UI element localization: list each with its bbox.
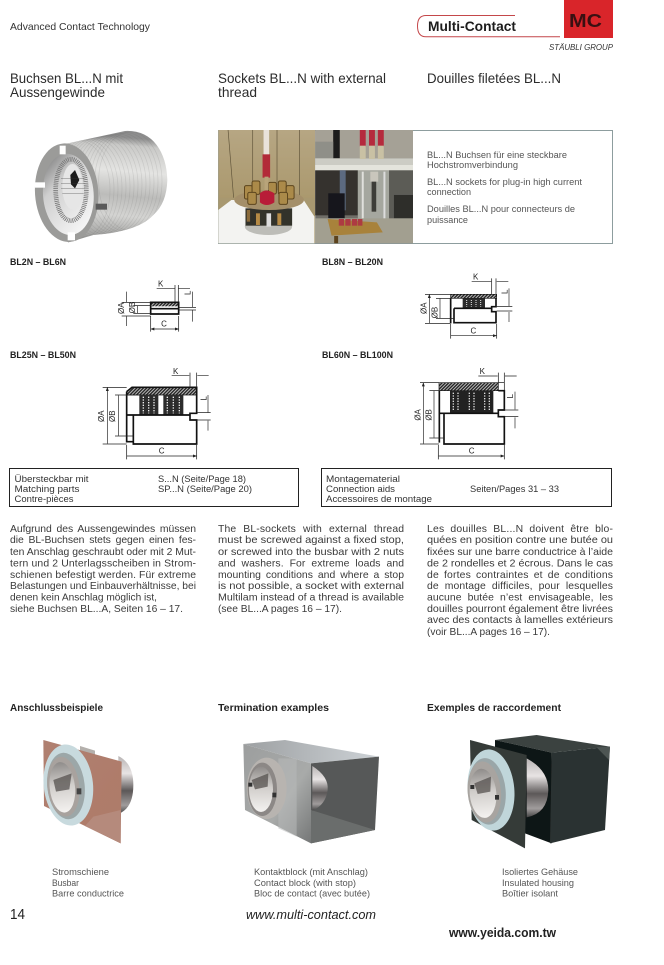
text block: French description: avec des contacts à lamelles extérieurs	[427, 615, 613, 626]
panel caption: plug-in high current connection: puissance	[427, 215, 468, 226]
box: connection aids: Accessoires de montage	[326, 494, 432, 505]
label: BL8N – BL20N: BL8N – BL20N	[322, 256, 383, 267]
caption: insulated housing	[502, 867, 578, 900]
drawing: BL60N–BL100N dimensions: ØA	[413, 408, 422, 421]
heading: German: Buchsen BL...N mit	[10, 70, 123, 86]
caption: contact block: Bloc de contact (avec butée)	[254, 888, 370, 900]
heading: English: thread	[218, 84, 257, 100]
caption: busbar: Barre conductrice	[52, 888, 124, 900]
text block: English description: is not possible, a socket with external	[218, 581, 404, 592]
text block: German description: Belastungen und Einbauverhältnisse, bei	[10, 581, 196, 592]
text block: French description: aucune butée n’est envisageable, les	[427, 592, 613, 604]
drawing: BL8N–BL20N dimensions	[420, 272, 512, 339]
text block: French description: (voir BL...A pages 16 – 17).	[427, 627, 550, 638]
label: BL2N – BL6N: BL2N – BL6N	[10, 256, 66, 267]
label: BL60N – BL100N: BL60N – BL100N	[322, 349, 393, 360]
text block: English description	[218, 524, 404, 615]
label: BL25N – BL50N: BL25N – BL50N	[10, 349, 76, 360]
text block: English description: The BL-sockets with external thread	[218, 524, 404, 535]
drawing: BL25N–BL50N dimensions: K	[173, 367, 179, 376]
box: matching parts	[10, 468, 298, 506]
website: yeida: www.yeida.com.tw	[448, 926, 556, 940]
text block: English description: mounting conditions and where a stop	[218, 570, 404, 581]
box: matching parts: S...N (Seite/Page 18)	[158, 474, 246, 485]
drawing: BL25N–BL50N dimensions: ØB	[108, 410, 117, 422]
text block: French description: de fortes contraintes et de conditions	[427, 570, 613, 581]
drawing: BL25N–BL50N dimensions	[97, 367, 211, 459]
page number: 14	[10, 907, 25, 923]
text block: French description	[427, 524, 613, 638]
header: running title: Advanced Contact Technology	[10, 22, 151, 33]
caption: busbar: Stromschiene	[52, 867, 109, 878]
drawing: BL2N–BL6N dimensions	[117, 279, 196, 332]
panel caption: plug-in high current connection: connection	[427, 187, 471, 198]
box: matching parts: Übersteckbar mit	[14, 474, 89, 485]
logo: Multi-Contact Stäubli Group: MC	[569, 11, 602, 31]
drawing: BL8N–BL20N dimensions: C	[470, 326, 476, 335]
photos: test setup with sockets	[218, 130, 413, 243]
box: connection aids: Montagematerial	[326, 474, 400, 485]
photo: press with red rods	[315, 130, 413, 243]
text block: French description: fixées sur une barre conductrice à l’aide	[427, 547, 613, 558]
drawing: BL8N–BL20N dimensions: ØA	[420, 302, 429, 314]
drawing: BL8N–BL20N dimensions: K	[473, 272, 479, 281]
drawing: BL60N–BL100N dimensions: K	[480, 367, 486, 376]
caption: insulated housing: Insulated housing	[502, 878, 574, 889]
text block: English description: and washers. For extreme loads and	[218, 558, 404, 570]
caption: busbar	[52, 867, 124, 900]
drawing: BL8N–BL20N dimensions: L	[500, 289, 509, 294]
drawing: BL60N–BL100N dimensions: ØB	[425, 409, 434, 421]
heading: Exemples de raccordement: Exemples de raccordement	[427, 702, 561, 714]
caption: busbar: Busbar	[52, 878, 80, 889]
panel caption: plug-in high current connection: Douilles BL...N pour connecteurs de	[427, 204, 575, 215]
box: matching parts: Contre-pièces	[14, 494, 74, 505]
panel caption: plug-in high current connection: BL...N sockets for plug-in high current	[427, 177, 582, 188]
logo: Multi-Contact Stäubli Group	[418, 0, 613, 52]
heading: English: Sockets BL...N with external	[218, 70, 386, 86]
text block: German description: ten Anschlag geschraubt oder mit 2 Mut-	[10, 547, 196, 558]
text block: German description: schienen befestigt werden. Für extreme	[10, 570, 196, 581]
heading: French: Douilles filetées BL...N	[427, 70, 561, 86]
caption: contact block: Kontaktblock (mit Anschlag)	[254, 867, 368, 878]
caption: contact block: Contact block (with stop)	[254, 878, 356, 889]
caption: insulated housing: Boîtier isolant	[502, 888, 558, 900]
drawing: BL60N–BL100N dimensions	[413, 367, 518, 459]
caption: insulated housing: Isoliertes Gehäuse	[502, 867, 578, 878]
drawing: BL60N–BL100N dimensions: L	[506, 393, 515, 398]
website: multi-contact: www.multi-contact.com	[246, 907, 376, 922]
box: matching parts: Matching parts	[14, 484, 80, 495]
text block: German description	[10, 524, 196, 615]
illustration: socket in contact block	[243, 740, 379, 843]
text block: French description: quées en position contre une butée ou	[427, 535, 613, 546]
drawing: BL2N–BL6N dimensions: L	[184, 290, 193, 295]
text block: French description: de 2 rondelles et 2 écrous. Dans le cas	[427, 558, 613, 570]
box: matching parts: SP...N (Seite/Page 20)	[158, 484, 252, 495]
text block: German description: denen kein Anschlag möglich ist,	[10, 592, 157, 604]
drawing: BL8N–BL20N dimensions: ØB	[431, 307, 440, 318]
box: connection aids: Connection aids	[326, 484, 395, 495]
text block: English description: must be screwed against a fixed stop,	[218, 535, 404, 546]
text block: English description: (see BL...A pages 16 – 17).	[218, 604, 342, 615]
heading: English	[218, 70, 386, 100]
illustration: socket on copper busbar	[40, 740, 133, 843]
text block: German description: Aufgrund des Aussengewindes müssen	[10, 524, 196, 535]
heading: Termination examples: Termination examples	[218, 702, 329, 714]
text block: French description: de montage difficiles, pour lesquelles	[427, 581, 613, 592]
text block: English description: Multilam instead of a thread is available	[218, 592, 404, 604]
panel caption: plug-in high current connection: Hochstromverbindung	[427, 160, 518, 171]
heading: Anschlussbeispiele: Anschlussbeispiele	[10, 702, 103, 714]
drawing: BL25N–BL50N dimensions: ØA	[97, 410, 106, 422]
text block: English description: or screwed into the busbar with 2 nuts	[218, 547, 404, 558]
drawing: BL2N–BL6N dimensions: K	[158, 279, 164, 288]
text block: German description: tern und 2 Unterlagsscheiben in Strom-	[10, 558, 196, 570]
photo: socket assembly with red rod	[218, 130, 315, 243]
drawing: BL60N–BL100N dimensions: C	[469, 446, 475, 455]
photo panel frame	[218, 130, 612, 244]
heading: German: Aussengewinde	[10, 84, 105, 100]
logo: Multi-Contact Stäubli Group: STÄUBLI GROUP	[549, 42, 613, 52]
product photo: threaded socket	[32, 131, 167, 244]
box: connection aids: Seiten/Pages 31 – 33	[470, 484, 559, 495]
illustration: socket in insulated housing	[464, 735, 610, 848]
caption: contact block	[254, 867, 370, 900]
panel caption: plug-in high current connection	[427, 150, 582, 226]
drawing: BL2N–BL6N dimensions: ØA	[117, 302, 126, 314]
heading: German	[10, 70, 123, 100]
text block: German description: siehe Buchsen BL...A, Seiten 16 – 17.	[10, 604, 183, 615]
box: connection aids	[322, 468, 612, 506]
drawing: BL2N–BL6N dimensions: C	[161, 320, 167, 329]
text block: French description: Les douilles BL...N doivent être blo-	[427, 524, 613, 535]
drawing: BL2N–BL6N dimensions: ØB	[128, 302, 137, 313]
drawing: BL25N–BL50N dimensions: L	[200, 396, 209, 401]
drawing: BL25N–BL50N dimensions: C	[159, 446, 165, 455]
text block: French description: douilles pourront également être livrées	[427, 604, 613, 615]
panel caption: plug-in high current connection: BL...N Buchsen für eine steckbare	[427, 150, 567, 161]
text block: German description: die BL-Buchsen stets gegen einen fes-	[10, 535, 196, 546]
logo: Multi-Contact Stäubli Group: Multi-Contact	[428, 19, 517, 34]
